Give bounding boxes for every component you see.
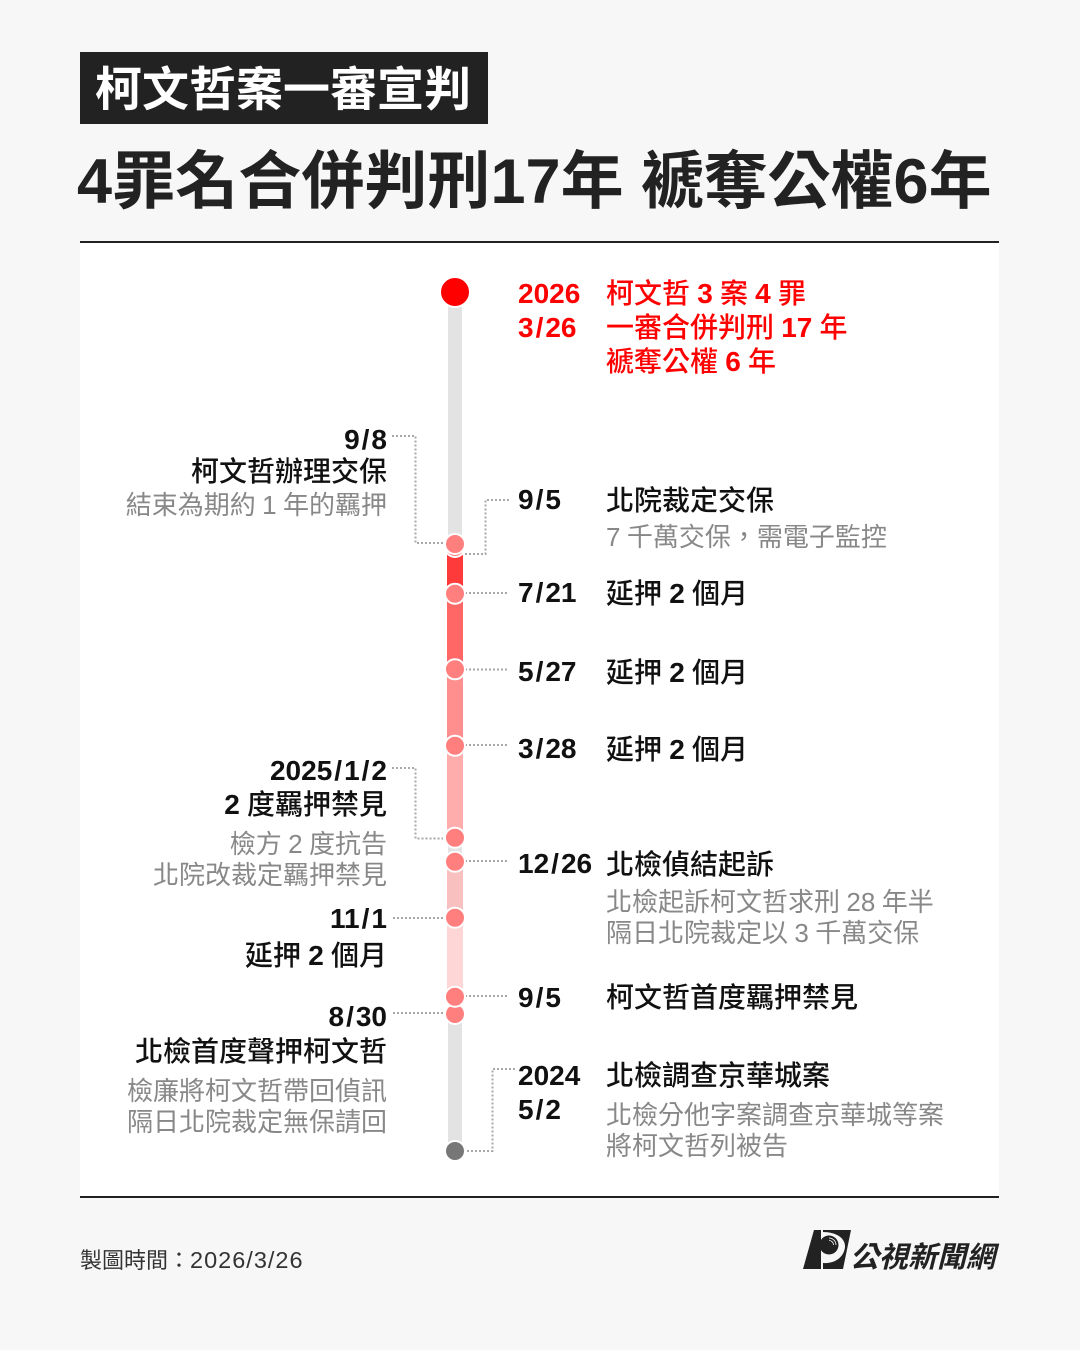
- event: 9/5 bail ruling: 9/5: [518, 484, 561, 515]
- timeline markers: [440, 277, 470, 1161]
- title tag: black label: 柯文哲案一審宣判: [95, 63, 471, 116]
- event: 9/8 bail: [126, 424, 387, 520]
- event: 2026 3/26 verdict: 3/26: [518, 312, 577, 343]
- event: 9/8 bail: 結束為期約 1 年的羈押: [126, 490, 387, 520]
- event: 2024 5/2: 將柯文哲列被告: [606, 1131, 788, 1161]
- event: 8/30: 檢廉將柯文哲帶回偵訊: [127, 1076, 387, 1106]
- event: 2026 3/26 verdict: 褫奪公權 6 年: [606, 346, 776, 377]
- event: 2025/1/2: 2025/1/2: [270, 755, 387, 786]
- footer date: 製圖時間：2026/3/26: [80, 1247, 304, 1273]
- event: 8/30: [127, 1001, 387, 1137]
- event: 2025/1/2: 北院改裁定羈押禁見: [153, 860, 387, 890]
- event: 5/27: 延押 2 個月: [606, 657, 748, 688]
- logo: PTS news network: 公視新聞網: [848, 1241, 1001, 1274]
- event: 2025/1/2: 檢方 2 度抗告: [230, 829, 387, 859]
- event: 12/26 indictment: [518, 848, 934, 948]
- event: 3/28: 3/28: [518, 733, 577, 764]
- event: 3/28: [518, 733, 748, 765]
- event: 2025/1/2: [153, 755, 387, 890]
- event: 7/21: 延押 2 個月: [606, 578, 748, 609]
- event: 9/5 detention: 柯文哲首度羈押禁見: [606, 982, 858, 1013]
- event: 8/30: 隔日北院裁定無保請回: [127, 1107, 387, 1137]
- event: 2026 3/26 verdict: [518, 278, 848, 377]
- event: 7/21: 7/21: [518, 577, 577, 608]
- timeline bar: [447, 300, 463, 1150]
- event: 12/26 indictment: 12/26: [518, 848, 592, 879]
- event: 12/26 indictment: 隔日北院裁定以 3 千萬交保: [606, 918, 919, 948]
- main heading: 4罪名合併判刑17年 褫奪公權6年: [77, 147, 992, 217]
- event: 9/5 bail ruling: 北院裁定交保: [606, 485, 774, 516]
- logo: PTS news network: [803, 1230, 1001, 1274]
- event: 5/27: 5/27: [518, 656, 577, 687]
- event: 2026 3/26 verdict: 柯文哲 3 案 4 罪: [606, 278, 806, 309]
- event: 9/8 bail: 柯文哲辦理交保: [191, 456, 387, 487]
- event: 9/8 bail: 9/8: [344, 424, 387, 455]
- event: 7/21: [518, 577, 748, 609]
- event: 3/28: 延押 2 個月: [606, 734, 748, 765]
- event: 11/1: 11/1: [330, 903, 387, 934]
- event: 2024 5/2: 5/2: [518, 1094, 561, 1125]
- panel: timeline: [80, 241, 999, 1198]
- event: 2024 5/2: [518, 1060, 944, 1161]
- event: 9/5 detention: 9/5: [518, 982, 561, 1013]
- event: 2026 3/26 verdict: 一審合併判刑 17 年: [606, 312, 848, 343]
- event: 12/26 indictment: 北檢偵結起訴: [606, 849, 774, 880]
- event: 2025/1/2: 2 度羈押禁見: [224, 789, 387, 820]
- event: 2024 5/2: 北檢調查京華城案: [606, 1060, 830, 1091]
- event: 8/30: 北檢首度聲押柯文哲: [135, 1036, 387, 1067]
- event: 2024 5/2: 2024: [518, 1060, 581, 1091]
- event: 11/1: 延押 2 個月: [245, 940, 387, 971]
- event: 12/26 indictment: 北檢起訴柯文哲求刑 28 年半: [606, 887, 934, 917]
- event: 9/5 bail ruling: 7 千萬交保，需電子監控: [606, 522, 887, 552]
- event: 2024 5/2: 北檢分他字案調查京華城等案: [606, 1100, 944, 1130]
- event: 2026 3/26 verdict: 2026: [518, 278, 580, 309]
- event: 11/1: [245, 903, 387, 971]
- event: 9/5 bail ruling: [518, 484, 887, 552]
- connector lines: [392, 436, 515, 1151]
- event: 5/27: [518, 656, 748, 688]
- title tag: black label: [80, 52, 488, 124]
- event: 8/30: 8/30: [328, 1001, 387, 1032]
